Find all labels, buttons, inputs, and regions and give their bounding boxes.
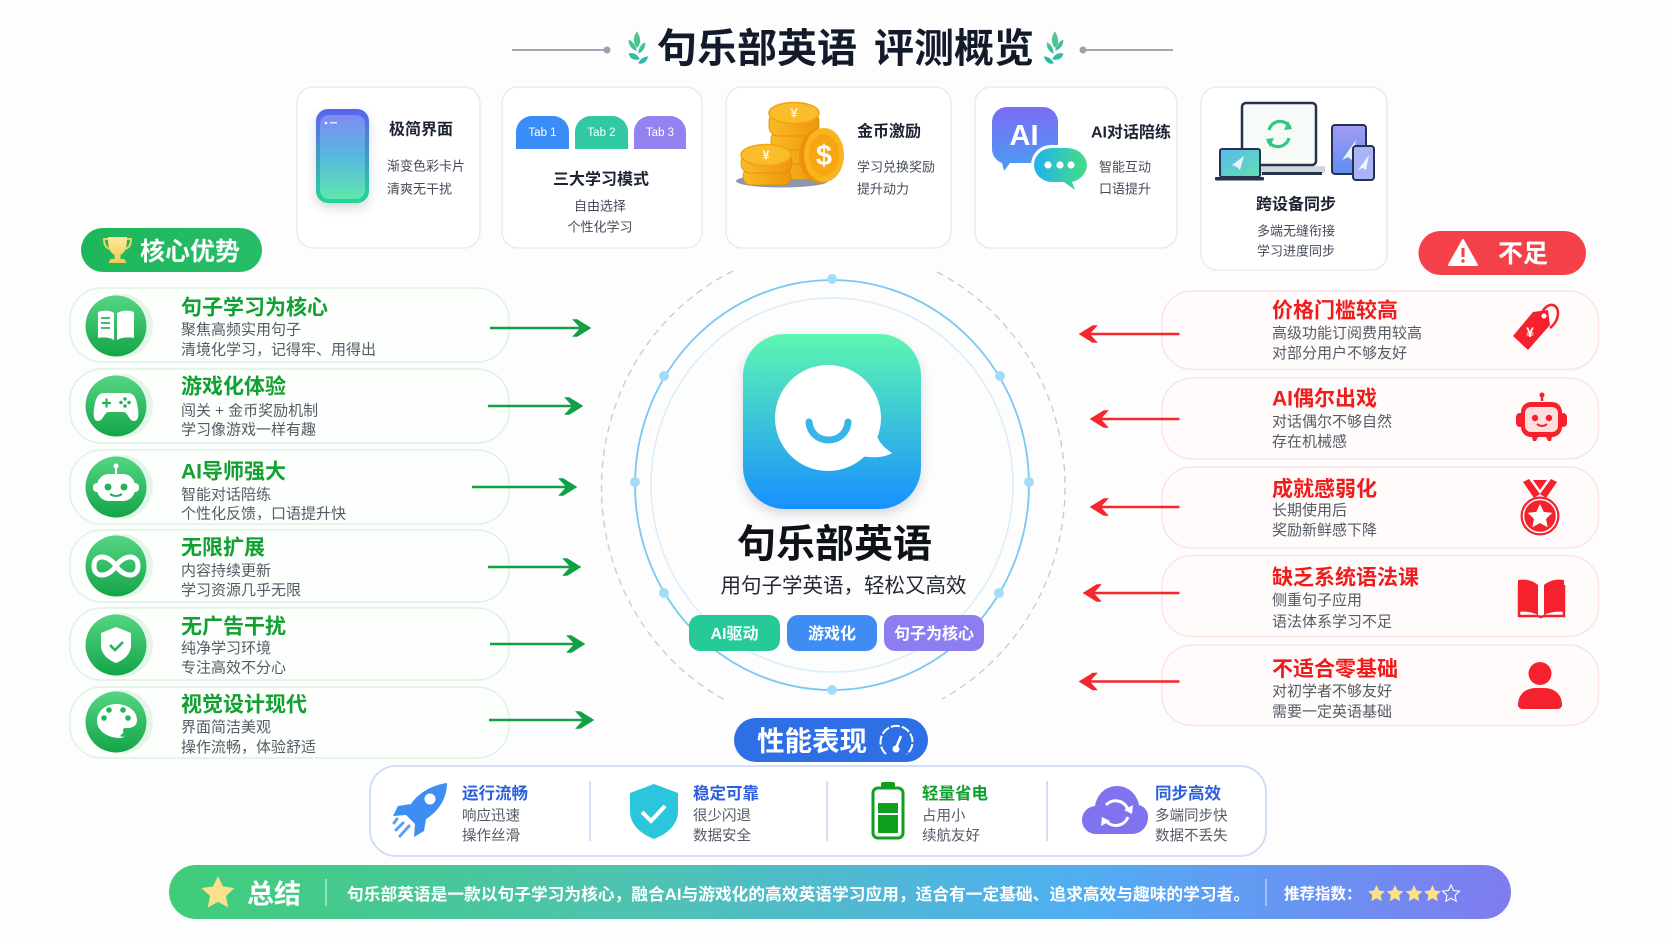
- icon: robot: [1516, 392, 1567, 441]
- panel: 三大学习模式: 自由选择: [574, 198, 626, 214]
- panel: 金币激励: 学习兑换奖励: [857, 160, 935, 174]
- icon: book: [1518, 580, 1564, 617]
- panel: weakness AI偶尔出戏: AI偶尔出戏: [1272, 388, 1377, 410]
- panel: 极简界面: 渐变色彩卡片: [387, 158, 465, 174]
- panel: 跨设备同步: 多端无缝衔接: [1257, 224, 1335, 238]
- panel: advantage 视觉设计现代: 视觉设计现代: [181, 694, 307, 716]
- rating stars: [1368, 885, 1459, 901]
- icon: open book: [86, 294, 153, 358]
- arrow: advantage 5: [490, 636, 583, 652]
- panel: advantage 游戏化体验: 闯关 + 金币奖励机制: [181, 402, 318, 420]
- panel: advantage 游戏化体验: 学习像游戏一样有趣: [181, 422, 316, 438]
- panel: performance: 轻量省电: [922, 784, 988, 803]
- panel: weakness 不适合零基础: 对初学者不够友好: [1272, 683, 1392, 700]
- panel: advantage 无限扩展: 无限扩展: [181, 536, 265, 560]
- panel: performance: 续航友好: [922, 828, 980, 844]
- panel: performance: [370, 766, 1266, 856]
- center rings: [602, 271, 1065, 700]
- arrow: advantage 2: [488, 398, 581, 414]
- panel: performance: 数据安全: [693, 826, 751, 844]
- panel: weakness 缺乏系统语法课: [1162, 556, 1599, 636]
- panel: advantage 游戏化体验: [70, 369, 509, 443]
- panel: advantage 视觉设计现代: [70, 687, 509, 758]
- summary bar: 推荐指数：: [1284, 885, 1362, 903]
- panel: performance: 数据不丢失: [1155, 828, 1228, 844]
- icon: devices: [1215, 103, 1374, 180]
- panel: weakness 价格门槛较高: [1162, 291, 1599, 370]
- panel: advantage 无广告干扰: 专注高效不分心: [181, 660, 286, 676]
- summary bar: 总结: [247, 880, 301, 910]
- panel: 极简界面: 极简界面: [389, 120, 453, 138]
- tags: [689, 615, 984, 651]
- panel: advantage 句子学习为核心: 清境化学习，记得牢、用得出: [181, 340, 376, 358]
- panel: advantage 句子学习为核心: 句子学习为核心: [181, 296, 328, 320]
- icon: rocket: [393, 783, 447, 837]
- icon: gauge: [880, 726, 912, 754]
- panel: weakness AI偶尔出戏: 对话偶尔不够自然: [1272, 414, 1392, 430]
- icon: AI chat bubbles: [992, 107, 1090, 190]
- arrow: advantage 4: [488, 560, 579, 574]
- heading: 不足: 不足: [1498, 240, 1548, 268]
- tags: 句子为核心: [894, 624, 974, 643]
- icon: price tag: [1513, 305, 1558, 350]
- arrow: weakness 4: [1085, 586, 1180, 600]
- summary bar: 句乐部英语是一款以句子学习为核心，融合AI与游戏化的高效英语学习应用，适合有一定基础、追求高效与趣味的学习者。: [347, 884, 1250, 904]
- tabs: Tab 1: [528, 127, 557, 139]
- arrow: advantage 6: [489, 712, 592, 728]
- heading: 性能表现: 性能表现: [757, 726, 867, 756]
- icon: cloud sync: [1082, 786, 1148, 834]
- tabs: Tab 3: [646, 127, 674, 139]
- icon: app logo: [743, 334, 921, 509]
- tagline: 用句子学英语，轻松又高效: [720, 574, 966, 598]
- panel: AI对话陪练: AI对话陪练: [1091, 122, 1171, 142]
- panel: weakness 不适合零基础: [1162, 645, 1599, 726]
- panel: weakness 不适合零基础: 不适合零基础: [1272, 658, 1398, 681]
- icon: gamepad: [86, 374, 153, 438]
- panel: weakness AI偶尔出戏: 存在机械感: [1272, 434, 1347, 450]
- panel: AI对话陪练: 口语提升: [1099, 182, 1151, 196]
- panel: 三大学习模式: 三大学习模式: [553, 170, 649, 188]
- panel: advantage AI导师强大: [70, 450, 509, 524]
- panel: advantage 句子学习为核心: 聚焦高频实用句子: [181, 322, 301, 338]
- icon: palette: [86, 690, 153, 754]
- tags: 游戏化: [808, 624, 856, 643]
- panel: 极简界面: 清爽无干扰: [387, 182, 452, 196]
- panel: advantage 视觉设计现代: 操作流畅，体验舒适: [181, 739, 316, 756]
- panel: weakness 成就感弱化: 奖励新鲜感下降: [1272, 522, 1377, 539]
- tabs: Tab 2: [587, 127, 616, 139]
- icon: warning: [1449, 240, 1477, 265]
- icon: price tag: ¥: [1526, 324, 1534, 340]
- icon: coins: [736, 102, 844, 188]
- heading: 不足: [1418, 231, 1586, 275]
- panel: 跨设备同步: 跨设备同步: [1256, 194, 1336, 214]
- icon: battery: [873, 782, 903, 838]
- icon: medal: [1520, 479, 1560, 536]
- icon: shield: [86, 613, 153, 677]
- panel: weakness 价格门槛较高: 对部分用户不够友好: [1272, 345, 1407, 362]
- icon: coins: ¥: [762, 148, 770, 162]
- tags: AI驱动: [710, 625, 759, 643]
- panel: 极简界面: [297, 87, 480, 248]
- heading: 性能表现: [734, 718, 928, 762]
- panel: 金币激励: [726, 87, 951, 248]
- panel: advantage 无广告干扰: [70, 608, 509, 680]
- arrow: weakness 1: [1081, 326, 1180, 342]
- title: 评测概览: [874, 27, 1034, 71]
- panel: weakness 不适合零基础: 需要一定英语基础: [1272, 702, 1392, 720]
- arrow: advantage 3: [472, 480, 575, 494]
- arrow: weakness 3: [1092, 500, 1180, 514]
- panel: advantage 视觉设计现代: 界面简洁美观: [181, 719, 271, 736]
- panel: performance: 响应迅速: [462, 806, 520, 824]
- panel: performance: 操作丝滑: [462, 828, 520, 844]
- panel: 金币激励: 提升动力: [857, 182, 909, 196]
- icon: AI chat bubbles: AI: [1010, 120, 1038, 152]
- panel: advantage AI导师强大: 个性化反馈，口语提升快: [181, 506, 346, 522]
- icon: trophy: [104, 237, 131, 263]
- panel: advantage AI导师强大: 智能对话陪练: [181, 486, 271, 504]
- panel: advantage AI导师强大: AI导师强大: [181, 460, 286, 484]
- arrow: advantage 1: [490, 320, 589, 336]
- icon: person: [1518, 662, 1562, 709]
- panel: AI对话陪练: [975, 87, 1177, 248]
- panel: advantage 无限扩展: 学习资源几乎无限: [181, 582, 301, 599]
- icon: coins: $: [816, 140, 832, 172]
- title: [512, 27, 1173, 71]
- panel: weakness 缺乏系统语法课: 语法体系学习不足: [1272, 614, 1392, 630]
- heading: 核心优势: [81, 228, 262, 272]
- panel: performance: 很少闪退: [693, 808, 751, 824]
- panel: performance: 稳定可靠: [693, 783, 759, 803]
- panel: 三大学习模式: 个性化学习: [567, 220, 633, 234]
- title: 句乐部英语: [657, 27, 857, 71]
- panel: advantage 无限扩展: 内容持续更新: [181, 562, 271, 580]
- panel: weakness 成就感弱化: 成就感弱化: [1272, 477, 1377, 501]
- panel: advantage 无广告干扰: 无广告干扰: [181, 616, 286, 638]
- icon: phone: [316, 109, 369, 203]
- panel: performance: 多端同步快: [1155, 808, 1228, 824]
- icon: shield: [630, 784, 678, 839]
- panel: advantage 无广告干扰: 纯净学习环境: [181, 639, 271, 657]
- panel: performance: 占用小: [922, 808, 966, 824]
- panel: weakness 价格门槛较高: 价格门槛较高: [1272, 298, 1398, 322]
- panel: performance: 运行流畅: [462, 784, 528, 803]
- panel: AI对话陪练: 智能互动: [1099, 160, 1151, 174]
- icon: robot: [86, 455, 153, 519]
- summary bar: [169, 865, 1511, 919]
- panel: advantage 游戏化体验: 游戏化体验: [181, 374, 286, 398]
- panel: 跨设备同步: [1201, 87, 1387, 270]
- icon: star: [202, 876, 234, 908]
- panel: weakness 价格门槛较高: 高级功能订阅费用较高: [1272, 324, 1422, 342]
- app name: 句乐部英语: [737, 524, 932, 566]
- arrow: weakness 2: [1092, 412, 1180, 426]
- panel: weakness 缺乏系统语法课: 缺乏系统语法课: [1272, 566, 1419, 590]
- panel: 金币激励: 金币激励: [857, 122, 921, 140]
- panel: weakness AI偶尔出戏: [1162, 378, 1599, 459]
- panel: advantage 句子学习为核心: [70, 288, 509, 362]
- panel: 跨设备同步: 学习进度同步: [1257, 244, 1335, 258]
- panel: 三大学习模式: [502, 87, 702, 248]
- heading: 核心优势: 核心优势: [140, 238, 240, 266]
- arrow: weakness 5: [1081, 674, 1180, 689]
- tabs: [516, 116, 686, 149]
- icon: infinity: [86, 534, 153, 598]
- panel: weakness 缺乏系统语法课: 侧重句子应用: [1272, 591, 1362, 609]
- icon: coins: ¥: [790, 106, 798, 120]
- panel: performance: 同步高效: [1155, 783, 1222, 803]
- panel: advantage 无限扩展: [70, 530, 509, 602]
- panel: weakness 成就感弱化: 长期使用后: [1272, 502, 1347, 519]
- panel: weakness 成就感弱化: [1162, 467, 1599, 548]
